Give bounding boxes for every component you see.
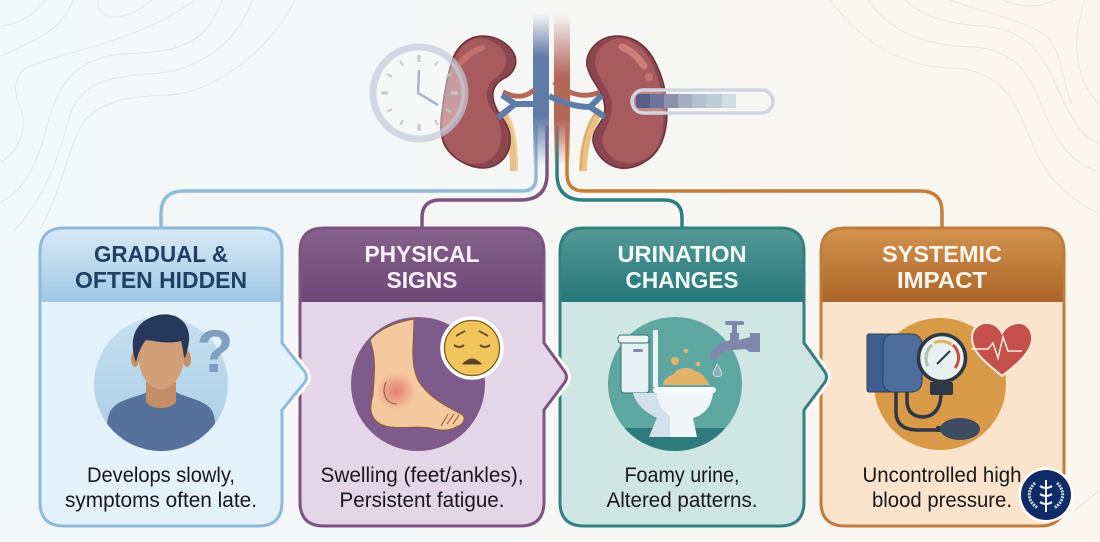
body text: Develops slowly, <box>87 464 235 487</box>
icon: swollen foot with sad face <box>351 317 502 451</box>
body text: Uncontrolled high <box>862 464 1022 487</box>
icon: toilet and faucet <box>600 317 760 458</box>
heading: SIGNS <box>386 267 458 293</box>
heading: PHYSICAL <box>364 241 480 267</box>
renal veins <box>498 95 605 118</box>
icon: kidneys and vessels <box>441 14 667 171</box>
icon: person with question mark <box>94 314 233 460</box>
vena cava <box>533 14 549 166</box>
body text: Foamy urine, <box>624 464 740 487</box>
heading: OFTEN HIDDEN <box>75 267 247 293</box>
heading: CHANGES <box>626 267 738 293</box>
heading: GRADUAL & <box>94 241 228 267</box>
heading <box>75 241 247 293</box>
panel: gradual and often hidden <box>40 228 306 526</box>
heading <box>364 241 480 293</box>
body text: Persistent fatigue. <box>340 489 504 512</box>
left kidney <box>441 36 516 168</box>
aorta <box>554 14 570 166</box>
icon: blood pressure monitor and heart <box>867 318 1032 450</box>
heading: URINATION <box>618 241 746 267</box>
renal arteries <box>503 82 600 96</box>
panel: systemic impact <box>821 228 1064 526</box>
heading <box>618 241 746 293</box>
icon: clock <box>373 47 465 139</box>
body text <box>320 464 524 512</box>
body text: symptoms often late. <box>65 489 257 512</box>
connector lines <box>161 125 942 227</box>
panel: urination changes <box>560 228 826 526</box>
ureters <box>502 110 601 171</box>
body text: blood pressure. <box>872 489 1012 512</box>
body text <box>862 464 1022 512</box>
body text: Altered patterns. <box>606 489 758 512</box>
body text <box>65 464 257 512</box>
right kidney <box>587 36 667 168</box>
icon: progress bar <box>632 90 773 113</box>
body text: Swelling (feet/ankles), <box>320 464 524 487</box>
logo badge <box>1018 468 1074 522</box>
icon: person with question mark: ? <box>197 318 233 385</box>
panel: physical signs <box>300 228 566 526</box>
body text <box>606 464 758 512</box>
heading: SYSTEMIC <box>882 241 1002 267</box>
heading: IMPACT <box>897 267 987 293</box>
heading <box>882 241 1002 293</box>
